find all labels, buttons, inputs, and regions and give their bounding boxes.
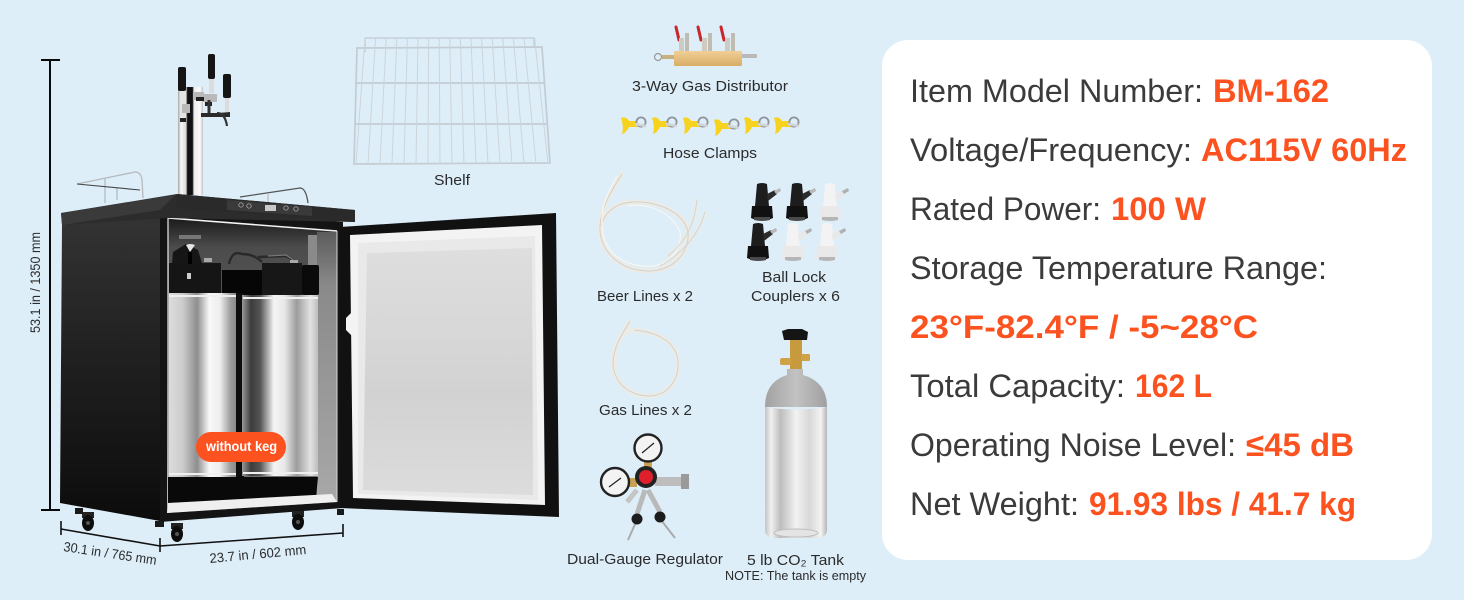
icon: hose clamps [621, 117, 799, 136]
keg bases [168, 477, 318, 503]
tap tower [77, 54, 308, 204]
spec: storage temperature: 23°F-82.4°F / -5~28°C [910, 309, 1258, 345]
keg left [169, 293, 236, 477]
depth dimension: 30.1 in / 765 mm [63, 539, 158, 568]
icon: gas lines [613, 321, 678, 396]
keg gap [236, 293, 244, 483]
keg rims [169, 296, 318, 474]
label: ball lock couplers: Ball Lock [762, 269, 827, 286]
note: tank empty: NOTE: The tank is empty [725, 569, 867, 583]
keg tops [169, 235, 319, 295]
label: regulator: Dual-Gauge Regulator [567, 551, 723, 568]
spec: voltage: Voltage/Frequency: [910, 132, 1192, 168]
spec: model number: BM-162 [1213, 73, 1329, 109]
icon: CO2 tank [765, 329, 827, 538]
badge: without keg [196, 432, 286, 462]
spec: capacity: Total Capacity: [910, 368, 1125, 404]
shelf [354, 38, 550, 164]
spec: noise: Operating Noise Level: [910, 427, 1236, 463]
width dimension [160, 524, 343, 566]
label: shelf: Shelf [434, 172, 471, 189]
spec: voltage [910, 132, 1407, 168]
label: hose clamps: Hose Clamps [663, 145, 757, 162]
label: gas lines: Gas Lines x 2 [599, 402, 692, 419]
spec: storage temperature: Storage Temperature Range: [910, 250, 1327, 286]
label: CO2 tank: 5 lb CO₂ Tank [747, 552, 845, 569]
spec: weight [910, 486, 1356, 522]
keg right [242, 295, 318, 476]
icon: ball lock couplers [747, 183, 849, 261]
badge: without keg: without keg [205, 439, 277, 454]
label: ball lock couplers [751, 269, 840, 305]
spec: rated power [910, 191, 1206, 227]
top plate [61, 194, 355, 225]
control panel [227, 200, 312, 216]
spec: storage temperature [910, 250, 1327, 345]
icon: dual-gauge regulator [601, 434, 689, 540]
depth dimension [61, 521, 160, 568]
spec: voltage: AC115V 60Hz [1201, 132, 1407, 168]
spec: weight: Net Weight: [910, 486, 1079, 522]
spec: rated power: 100 W [1111, 191, 1206, 227]
icon: gas distributor [654, 27, 757, 66]
spec: noise: ≤45 dB [1246, 427, 1354, 463]
open door [340, 213, 559, 517]
panel: specifications [882, 40, 1432, 560]
width dimension: 23.7 in / 602 mm [209, 542, 307, 566]
icon: beer lines [600, 174, 705, 271]
height dimension line: 53.1 in / 1350 mm [28, 232, 43, 333]
cabinet side [60, 210, 160, 521]
height dimension line [28, 60, 60, 510]
interior [167, 218, 337, 513]
label: beer lines: Beer Lines x 2 [597, 288, 693, 305]
kegerator [60, 54, 559, 542]
spec: capacity: 162 L [1135, 368, 1212, 404]
spec: model number: Item Model Number: [910, 73, 1203, 109]
label: ball lock couplers: Couplers x 6 [751, 288, 840, 305]
cabinet floor [167, 494, 337, 513]
casters [75, 508, 344, 542]
label: gas distributor: 3-Way Gas Distributor [632, 78, 788, 95]
cabinet front frame [160, 210, 343, 522]
spec: rated power: Rated Power: [910, 191, 1101, 227]
spec: weight: 91.93 lbs / 41.7 kg [1089, 486, 1356, 522]
